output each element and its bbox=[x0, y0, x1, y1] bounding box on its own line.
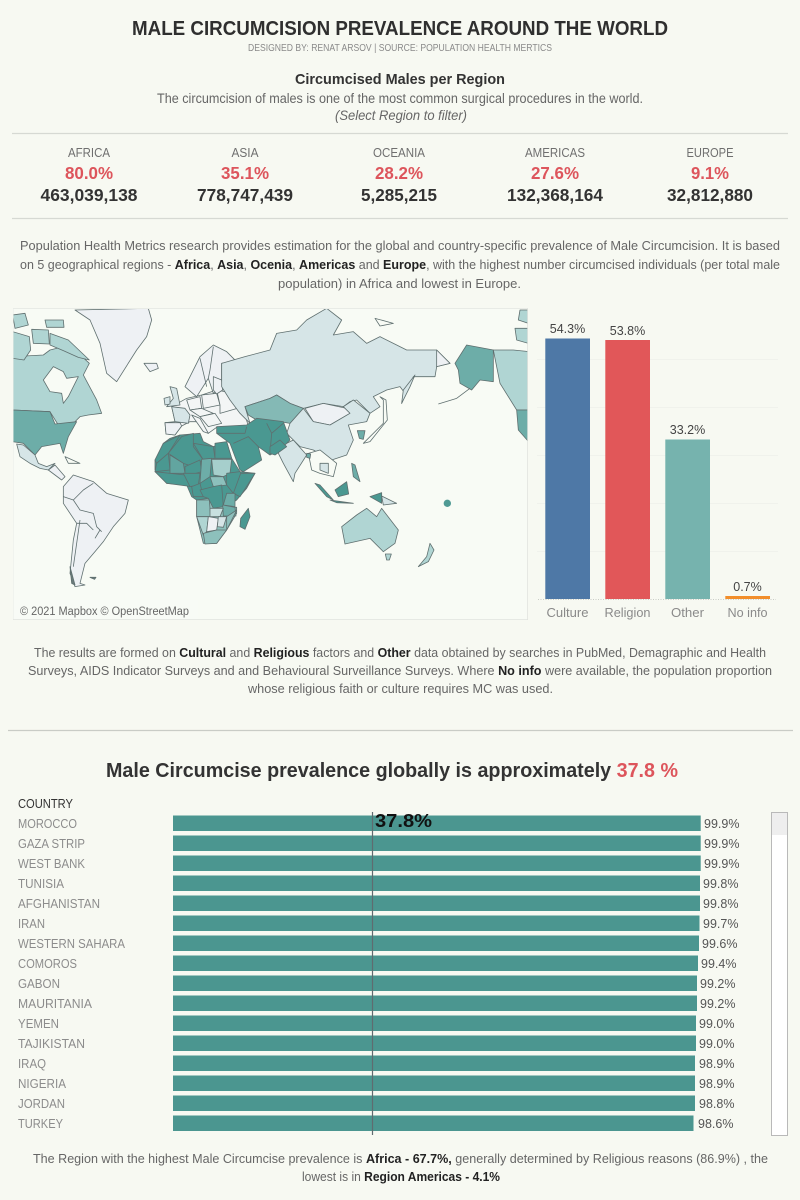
row: Mauritania bbox=[18, 996, 735, 1011]
intro text: The circumcision of males is one of the most common surgical procedures in the world. bbox=[157, 91, 643, 106]
row: Turkey: 98.6% bbox=[698, 1117, 733, 1131]
bar chart: reasons: 33.2% bbox=[670, 423, 705, 437]
row: West Bank: WEST BANK bbox=[18, 856, 85, 871]
row: Iran: IRAN bbox=[18, 916, 45, 931]
stat: Americas: AMERICAS bbox=[525, 145, 585, 160]
row: Western Sahara: WESTERN SAHARA bbox=[18, 936, 125, 951]
row: Iraq bbox=[18, 1056, 734, 1071]
row: Comoros: 99.4% bbox=[701, 957, 736, 971]
title: MALE CIRCUMCISION PREVALENCE AROUND THE WORLD bbox=[132, 18, 668, 40]
row: Iraq: IRAQ bbox=[18, 1056, 46, 1071]
stat: Oceania: 28.2% bbox=[375, 163, 423, 183]
footer summary: lowest is in Region Americas - 4.1% bbox=[302, 1169, 500, 1184]
India bbox=[278, 440, 307, 482]
Africa base south bbox=[197, 498, 237, 543]
methodology paragraph: whose religious faith or culture requires MC was used. bbox=[247, 681, 553, 696]
row: Tajikistan: 99.0% bbox=[699, 1037, 734, 1051]
Africa base north bbox=[155, 433, 255, 507]
row: Turkey: TURKEY bbox=[18, 1116, 63, 1131]
row: Nigeria: 98.9% bbox=[699, 1077, 734, 1091]
New Zealand bbox=[418, 543, 434, 567]
methodology paragraph: Surveys, AIDS Indicator Surveys and and Behavioural Surveillance Surveys. Where No info were available, the population proportion bbox=[28, 663, 772, 678]
row: Western Sahara: 99.6% bbox=[702, 937, 737, 951]
heading: global prevalence: Male Circumcise prevalence globally is approximately 37.8 % bbox=[106, 760, 678, 782]
row: West Bank: 99.9% bbox=[704, 857, 739, 871]
bar chart: reasons: Culture bbox=[546, 605, 588, 620]
row: Gabon: 99.2% bbox=[700, 977, 735, 991]
description paragraph: Population Health Metrics research provides estimation for the global and country-specific prevalence of Male Circumcision. It is based bbox=[20, 238, 780, 253]
stat: Oceania bbox=[361, 145, 437, 205]
Madagascar bbox=[240, 508, 250, 529]
row: Morocco: 99.9% bbox=[704, 817, 739, 831]
row: Iran: 99.7% bbox=[703, 917, 738, 931]
panel: region stats bbox=[40, 145, 753, 205]
reference line: global average bbox=[372, 812, 374, 1135]
row: Afghanistan: AFGHANISTAN bbox=[18, 896, 100, 911]
Russia bbox=[222, 308, 450, 423]
bar: culture bbox=[545, 338, 590, 599]
bar chart: reasons: Religion bbox=[604, 605, 650, 620]
USA bbox=[13, 410, 77, 455]
row: Morocco bbox=[18, 816, 739, 831]
Australia bbox=[342, 508, 398, 552]
methodology paragraph bbox=[28, 645, 772, 696]
row: Iran bbox=[18, 916, 738, 931]
Europe countries bbox=[172, 407, 190, 423]
bar chart: reasons: 53.8% bbox=[610, 324, 645, 338]
Scandinavia bbox=[185, 345, 237, 397]
Western USA bbox=[517, 410, 530, 443]
South America bbox=[63, 475, 128, 587]
description paragraph bbox=[20, 238, 780, 291]
row: Tajikistan bbox=[18, 1036, 734, 1051]
row: Comoros: COMOROS bbox=[18, 956, 77, 971]
bar chart: reasons: 0.7% bbox=[733, 580, 762, 594]
China bbox=[287, 400, 370, 460]
row: Comoros bbox=[18, 956, 736, 971]
stat: Americas: 132,368,164 bbox=[507, 185, 603, 205]
stat: Americas: 27.6% bbox=[531, 163, 579, 183]
row: Gabon bbox=[18, 976, 735, 991]
bar chart: reasons: Other bbox=[671, 605, 705, 620]
row: Jordan bbox=[18, 1096, 734, 1111]
row: Tunisia: TUNISIA bbox=[18, 876, 64, 891]
row: Mauritania: MAURITANIA bbox=[18, 996, 92, 1011]
row: Jordan: 98.8% bbox=[699, 1097, 734, 1111]
footer summary bbox=[33, 1151, 768, 1184]
map attribution: © 2021 Mapbox © OpenStreetMap bbox=[20, 606, 189, 618]
Alaska bbox=[455, 345, 493, 390]
row: Yemen bbox=[18, 1016, 734, 1031]
Greenland bbox=[75, 308, 152, 382]
bar: other bbox=[665, 440, 710, 599]
stat: Asia: 778,747,439 bbox=[197, 185, 293, 205]
Mongolia bbox=[305, 403, 350, 425]
bar chart: reasons: 54.3% bbox=[550, 322, 585, 336]
stat: Europe: 9.1% bbox=[691, 163, 729, 183]
bar: religion bbox=[605, 340, 650, 599]
Mexico bbox=[17, 444, 55, 470]
North Africa bbox=[155, 435, 180, 463]
credits: DESIGNED BY: RENAT ARSOV | SOURCE: POPULATION HEALTH MERTICS bbox=[248, 43, 552, 54]
Canada bbox=[13, 347, 102, 425]
SE Asia bbox=[308, 450, 337, 477]
Western Canada bbox=[493, 350, 530, 410]
row: Gaza Strip: GAZA STRIP bbox=[18, 836, 85, 851]
stat: Oceania: 5,285,215 bbox=[361, 185, 437, 205]
bar: no info bbox=[725, 596, 770, 599]
UK and Ireland bbox=[167, 387, 180, 407]
row: Western Sahara bbox=[18, 936, 737, 951]
row: Morocco: MOROCCO bbox=[18, 816, 77, 831]
stat: Africa: 80.0% bbox=[65, 163, 113, 183]
stat: Americas bbox=[507, 145, 603, 205]
row: Nigeria: NIGERIA bbox=[18, 1076, 66, 1091]
bar chart: reasons: No info bbox=[728, 605, 768, 620]
row: West Bank bbox=[18, 856, 739, 871]
Kazakhstan bbox=[245, 395, 303, 425]
Europe base bbox=[165, 387, 248, 435]
stat: Asia bbox=[197, 145, 293, 205]
filter hint: (Select Region to filter) bbox=[335, 108, 467, 123]
methodology paragraph: The results are formed on Cultural and Religious factors and Other data obtained by searches in PubMed, Demagraphic and Health bbox=[34, 645, 766, 660]
stat: Africa: 463,039,138 bbox=[40, 185, 138, 205]
stat: Oceania: OCEANIA bbox=[373, 145, 425, 160]
row: Jordan: JORDAN bbox=[18, 1096, 65, 1111]
row: Afghanistan bbox=[18, 896, 738, 911]
row: Mauritania: 99.2% bbox=[700, 997, 735, 1011]
row: Iraq: 98.9% bbox=[699, 1057, 734, 1071]
bar chart: reasons bbox=[537, 322, 778, 620]
reference label: 37.8% bbox=[375, 811, 432, 831]
stat: Europe: EUROPE bbox=[686, 145, 734, 160]
row: Yemen: 99.0% bbox=[699, 1017, 734, 1031]
row: Nigeria bbox=[18, 1076, 734, 1091]
Japan bbox=[363, 397, 387, 443]
description paragraph: on 5 geographical regions - Africa, Asia, Ocenia, Americas and Europe, with the highest number circumcised individuals (per total male bbox=[20, 257, 780, 272]
row: Tunisia: 99.8% bbox=[703, 877, 738, 891]
Pacific island bbox=[444, 500, 451, 507]
stat: Asia: 35.1% bbox=[221, 163, 269, 183]
row: Gaza Strip: 99.9% bbox=[704, 837, 739, 851]
row: Turkey bbox=[18, 1116, 733, 1131]
row: Tunisia bbox=[18, 876, 738, 891]
row: Tajikistan: TAJIKISTAN bbox=[18, 1036, 85, 1051]
Indonesia bbox=[315, 483, 333, 500]
description paragraph: population) in Africa and lowest in Europe. bbox=[278, 276, 521, 291]
Middle East base bbox=[217, 418, 290, 472]
country bar chart bbox=[18, 797, 739, 1135]
column header: COUNTRY bbox=[18, 797, 74, 811]
scrollbar bbox=[772, 812, 788, 1136]
row: Yemen: YEMEN bbox=[18, 1016, 59, 1031]
footer summary: The Region with the highest Male Circumcise prevalence is Africa - 67.7%, generally determined by Religious reasons (86.9%) , the bbox=[33, 1151, 768, 1166]
heading: circumcised males per region: Circumcised Males per Region bbox=[295, 71, 505, 88]
stat: Africa: AFRICA bbox=[68, 145, 110, 160]
row: Afghanistan: 99.8% bbox=[703, 897, 738, 911]
stat: Europe bbox=[667, 145, 753, 205]
Central and Southern Africa bbox=[200, 485, 223, 508]
row: Gabon: GABON bbox=[18, 976, 60, 991]
stat: Asia: ASIA bbox=[232, 145, 259, 160]
world map bbox=[13, 308, 528, 620]
row: Gaza Strip bbox=[18, 836, 739, 851]
stat: Africa bbox=[40, 145, 138, 205]
Korea bbox=[357, 431, 365, 439]
stat: Europe: 32,812,880 bbox=[667, 185, 753, 205]
Pakistan area bbox=[270, 440, 287, 455]
